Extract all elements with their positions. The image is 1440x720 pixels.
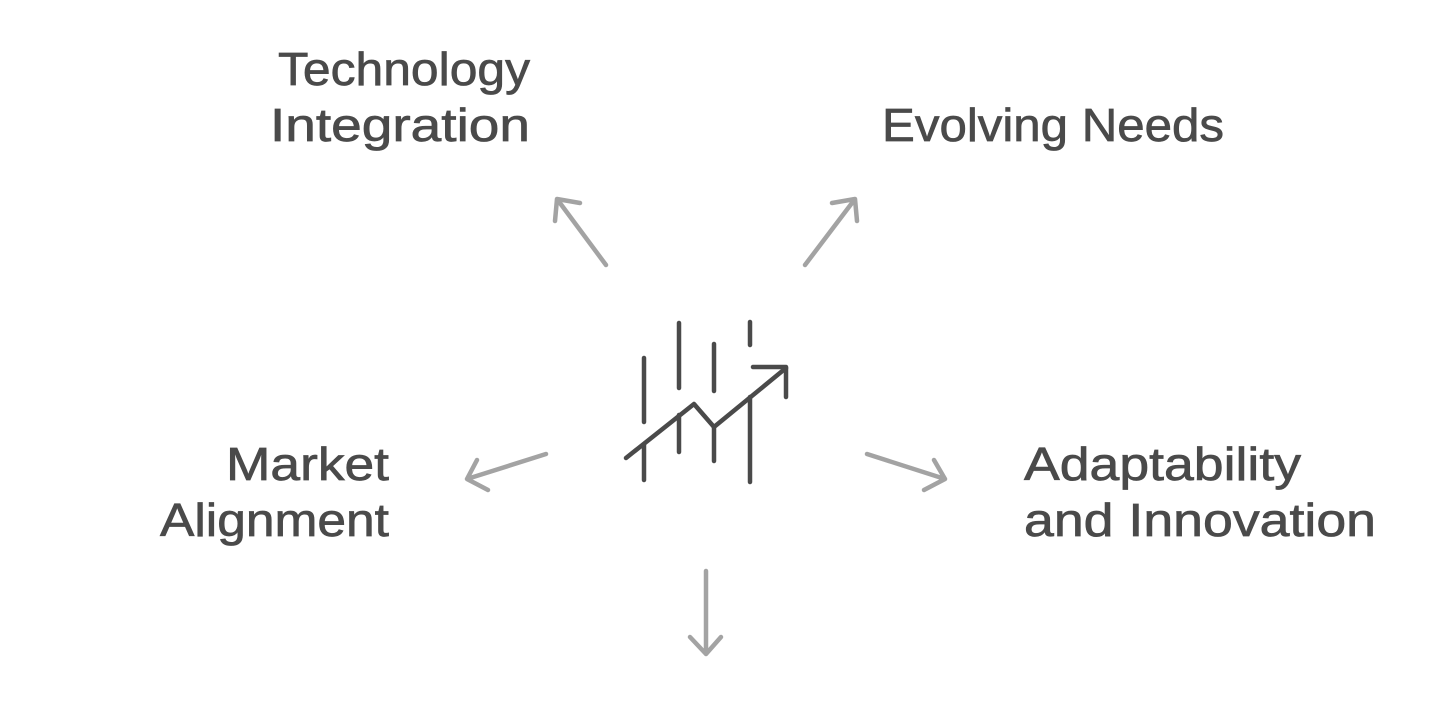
- label: Adaptability and Innovation: and Innovation: [1024, 494, 1376, 546]
- label: Market Alignment: Alignment: [160, 494, 389, 546]
- arrow: to Evolving Needs: [805, 199, 857, 265]
- label: Adaptability and Innovation: [1024, 438, 1376, 546]
- arrow: to Market Alignment: [467, 454, 546, 490]
- label: Technology Integration: [270, 43, 530, 151]
- label: Market Alignment: Market: [226, 438, 389, 490]
- arrow: to Technology Integration: [555, 199, 606, 265]
- label: Adaptability and Innovation: Adaptability: [1024, 438, 1301, 490]
- arrow: to Adaptability and Innovation: [867, 454, 945, 490]
- label: Market Alignment: [160, 438, 389, 546]
- label: Technology Integration: Integration: [270, 99, 530, 151]
- label: Evolving Needs: Evolving Needs: [882, 99, 1224, 151]
- label: Technology Integration: Technology: [278, 43, 530, 95]
- arrow: downward: [690, 571, 721, 654]
- icon: rising chart: [626, 322, 786, 482]
